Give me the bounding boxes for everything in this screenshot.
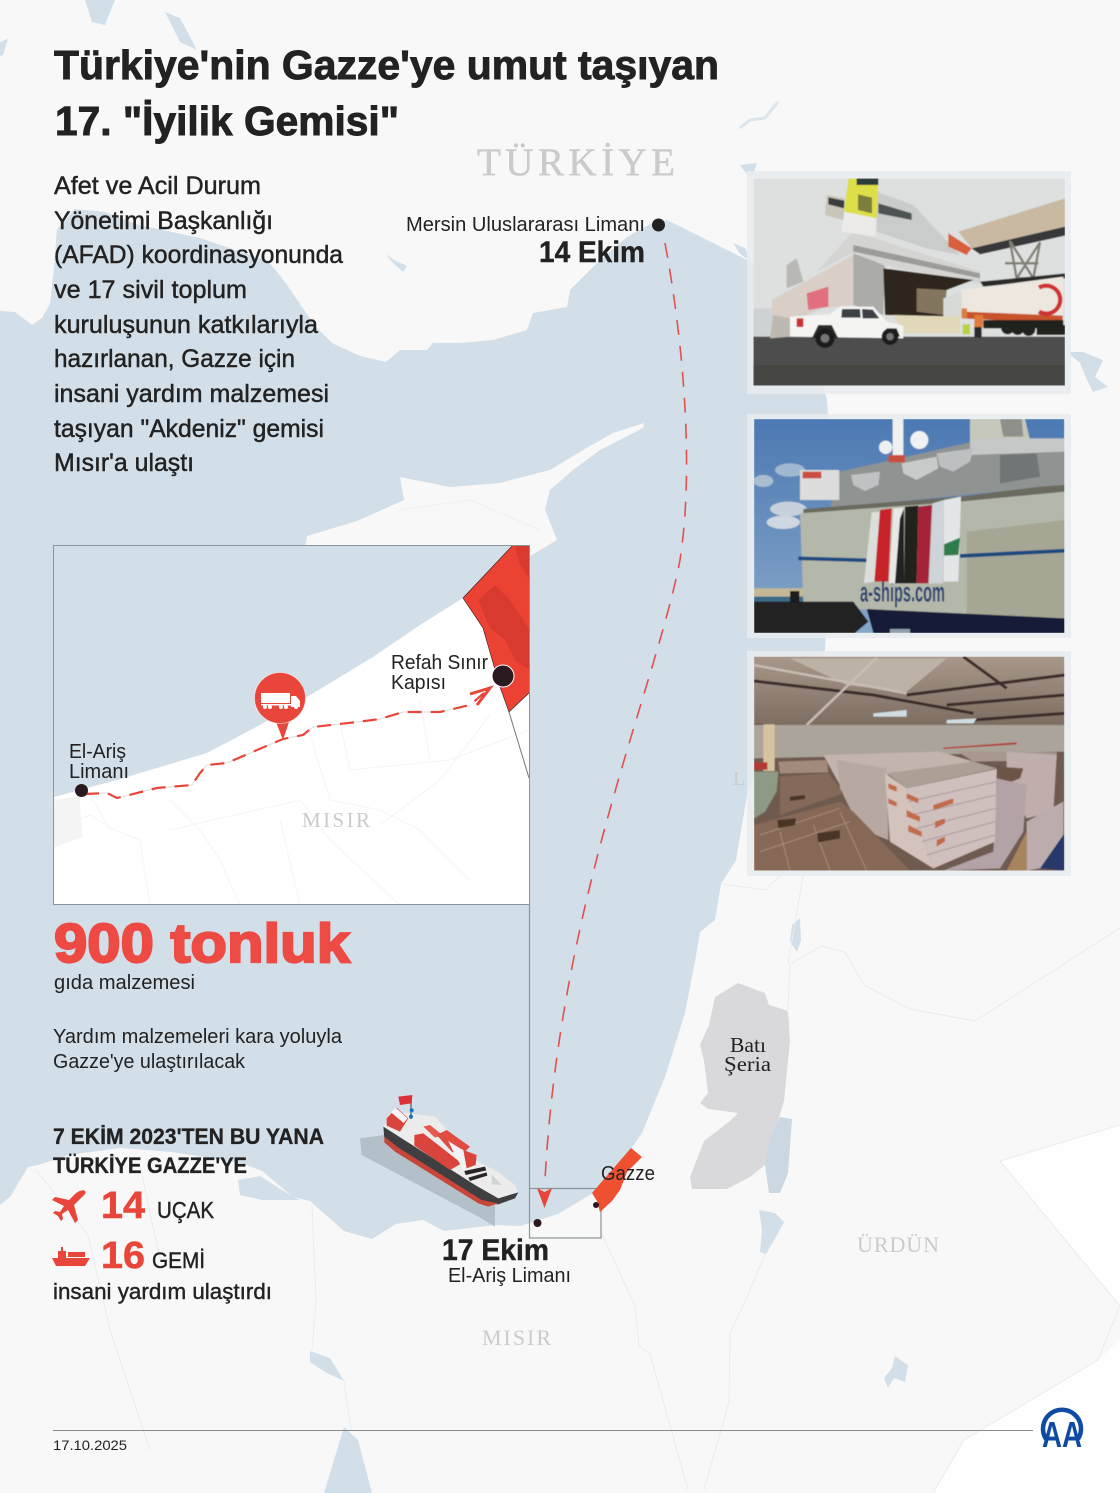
arrival label: 17 Ekim El-Ariş: 17 Ekim <box>442 1234 549 1267</box>
intro text: (AFAD) koordinasyonunda <box>54 241 343 269</box>
title <box>54 42 719 144</box>
land: Cyprus <box>300 423 644 580</box>
port dot: Mersin <box>652 218 665 232</box>
country label: partly hidden Lübnan: L <box>733 768 745 790</box>
intro text: insani yardım malzemesi <box>54 380 329 408</box>
photo 2: ship with banners: a-ships.com <box>860 577 945 608</box>
icon: ship <box>52 1247 90 1266</box>
label: Batı Şeria <box>724 1033 772 1076</box>
label: El-Ariş Limanı: El-Ariş <box>69 741 126 763</box>
stat: 900 tonluk: 900 tonluk <box>54 912 350 974</box>
icon: truck pin <box>254 672 306 740</box>
date: 17.10.2025 <box>53 1437 127 1453</box>
photo 1: ship loading with truck <box>747 171 1071 394</box>
road under route <box>85 705 470 798</box>
label: Gazze: Gazze <box>601 1163 655 1185</box>
port label: Mersin <box>406 214 645 269</box>
logo: AA: AA <box>1042 1414 1082 1455</box>
intro text: ve 17 sivil toplum <box>54 276 247 304</box>
stat: 14 planes: UÇAK <box>157 1197 215 1223</box>
gaza area <box>463 545 530 712</box>
stat: 16 ships: 16 <box>101 1235 145 1277</box>
label: El-Ariş Limanı <box>69 741 129 783</box>
port label: Mersin: Mersin Uluslararası Limanı <box>406 214 645 236</box>
sea route <box>545 243 687 1180</box>
dot: El-Ariş port <box>534 1219 542 1227</box>
heading: since 7 October: TÜRKİYE GAZZE'YE <box>53 1153 247 1178</box>
port label: Mersin: 14 Ekim <box>539 236 645 269</box>
intro text: Afet ve Acil Durum <box>54 172 261 200</box>
marker: El-Ariş <box>75 784 88 797</box>
arrival label: 17 Ekim El-Ariş: El-Ariş Limanı <box>448 1265 571 1287</box>
dot: Refah <box>593 1202 599 1208</box>
intro text: Yönetimi Başkanlığı <box>54 207 273 235</box>
route arrowhead <box>537 1188 552 1208</box>
icon: plane <box>52 1190 86 1223</box>
heading: since 7 October <box>53 1124 324 1178</box>
country label: Mısır: MISIR <box>482 1325 551 1350</box>
country label: Türkiye: TÜRKİYE <box>477 141 675 184</box>
photo 2: ship with banners <box>747 414 1071 638</box>
label: Refah Sınır Kapısı: Refah Sınır <box>391 652 488 674</box>
text: land delivery note: Yardım malzemeleri kara yoluyla <box>53 1026 343 1048</box>
truck route <box>85 693 484 798</box>
intro text: taşıyan "Akdeniz" gemisi <box>54 415 324 443</box>
label: Refah Sınır Kapısı <box>391 652 488 694</box>
illustration: cargo ship <box>360 1095 518 1227</box>
label: Batı Şeria: Şeria <box>724 1052 772 1076</box>
marker: Refah <box>492 665 514 687</box>
stat: 16 ships <box>101 1235 205 1277</box>
intro text <box>54 172 343 477</box>
stat: 14 planes <box>101 1185 215 1227</box>
intro text: kuruluşunun katkılarıyla <box>54 311 318 339</box>
intro text: Mısır'a ulaştı <box>54 449 194 477</box>
stat: 900 tonluk <box>54 912 350 994</box>
land: Saudi Arabia <box>933 1125 1120 1493</box>
photo 3: aid pallets in hold <box>747 651 1071 876</box>
label: Batı Şeria: Batı <box>730 1033 766 1057</box>
west bank region <box>690 983 790 1189</box>
label: El-Ariş Limanı: Limanı <box>69 761 129 783</box>
heading: since 7 October: 7 EKİM 2023'TEN BU YANA <box>53 1124 324 1149</box>
title: 17. "İyilik Gemisi" <box>55 98 399 144</box>
intro text: hazırlanan, Gazze için <box>54 345 295 373</box>
text: land delivery note <box>53 1026 343 1073</box>
label: Refah Sınır Kapısı: Kapısı <box>391 672 446 694</box>
inset border line <box>509 712 529 778</box>
stat: 14 planes: 14 <box>101 1185 145 1227</box>
gaza strip on main map <box>592 1148 642 1212</box>
title: Türkiye'nin Gazze'ye umut taşıyan <box>54 42 719 88</box>
label: Mısır: MISIR <box>302 808 370 832</box>
footer rule <box>53 1430 1033 1432</box>
country label: Ürdün: ÜRDÜN <box>857 1232 939 1257</box>
dead sea <box>765 1117 792 1193</box>
inset land <box>54 545 540 905</box>
panel: inset map <box>54 545 540 905</box>
sea: Mediterranean <box>0 209 830 1239</box>
text: aid delivered: insani yardım ulaştırdı <box>53 1279 272 1304</box>
connector lines and zoom box <box>530 905 601 1238</box>
stat: 16 ships: GEMİ <box>152 1248 205 1273</box>
stat: 900 tonluk: gıda malzemesi <box>54 972 195 994</box>
truck route arrowhead <box>470 688 490 705</box>
text: land delivery note: Gazze'ye ulaştırılacak <box>53 1051 246 1073</box>
arrival label: 17 Ekim El-Ariş <box>442 1234 571 1287</box>
borders and rivers <box>600 872 1120 1493</box>
